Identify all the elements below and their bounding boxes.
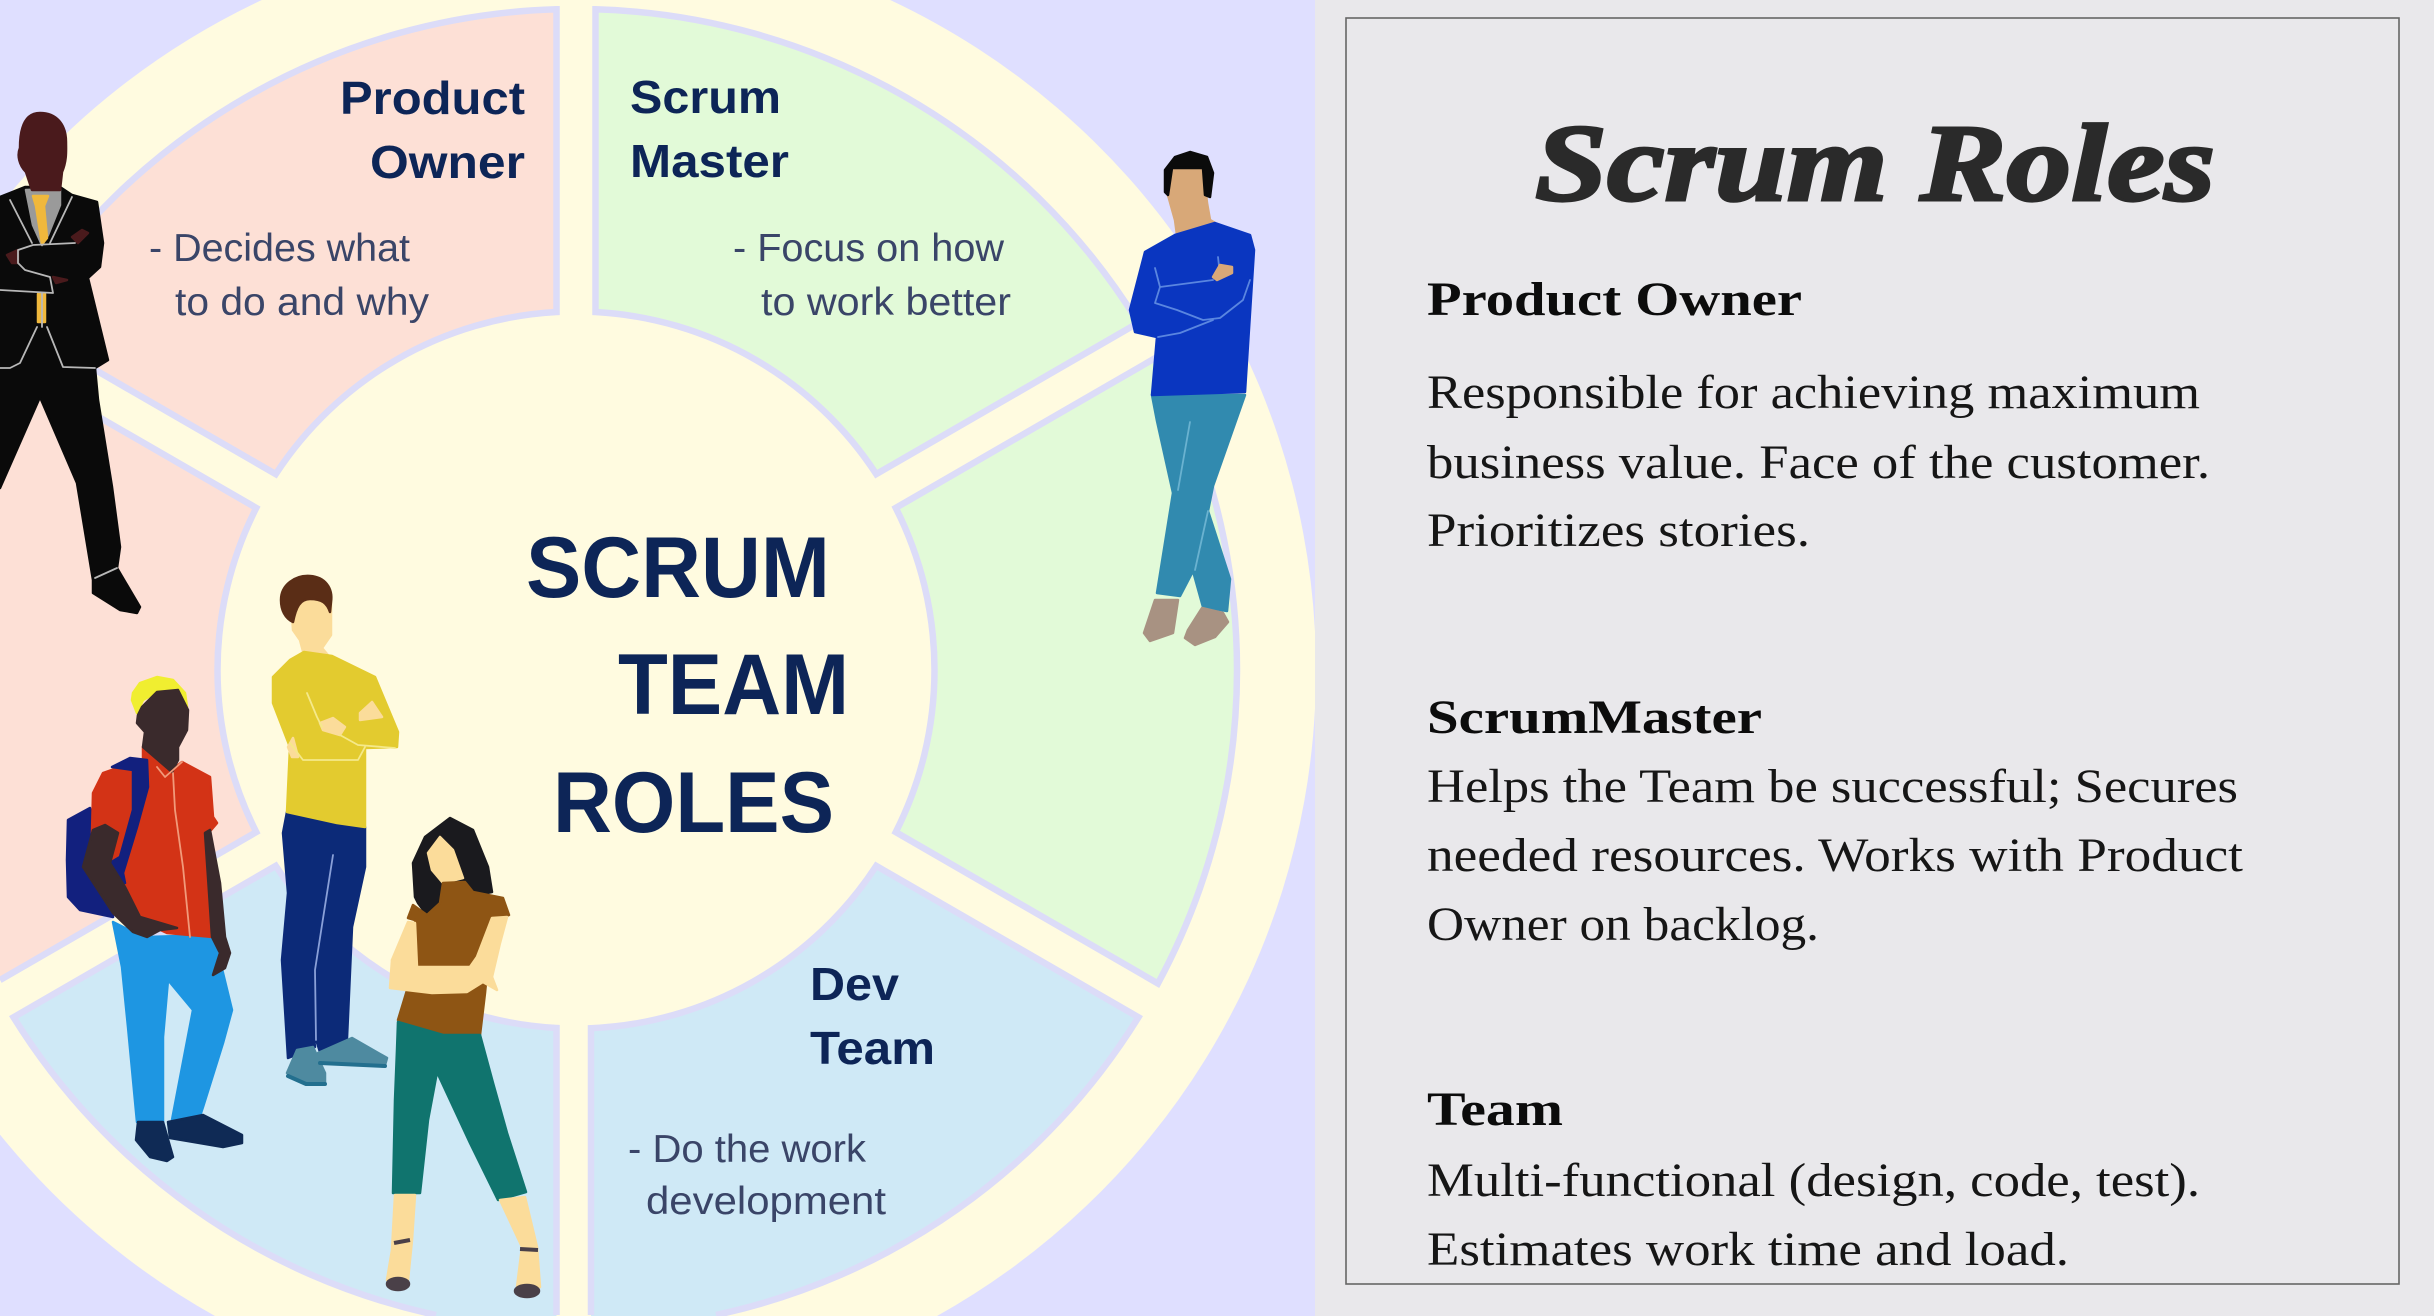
text: team role: Multi-functional (design, code, test). (1427, 1154, 2200, 1207)
figure: man in blue sweater (1130, 152, 1254, 645)
text: scrummaster role (1427, 760, 2244, 951)
heading: dev team: Team (810, 1022, 935, 1074)
figure: woman in brown top (387, 818, 540, 1297)
heading: scrum master (630, 71, 789, 187)
segment: dev team left (14, 866, 556, 1316)
outer cream disc (0, 0, 1315, 1316)
text: dev team description: - Do the work (628, 1128, 867, 1171)
heading: scrum master: Scrum (630, 71, 781, 123)
text: dev team description (628, 1128, 886, 1223)
text: product owner role: Prioritizes stories. (1427, 504, 1810, 557)
segment: scrum master right (896, 357, 1237, 983)
figure: man in suit (0, 113, 140, 613)
text: scrummaster role: Owner on backlog. (1427, 898, 1819, 951)
panel: scrum roles description (1346, 18, 2399, 1284)
text: team role: Estimates work time and load. (1427, 1223, 2069, 1276)
panel: scrum team wheel (0, 0, 1315, 1316)
text: product owner description (149, 227, 430, 324)
heading: product owner: Product (340, 72, 525, 124)
segment: scrum master top (596, 9, 1138, 474)
heading: scrum master: Master (630, 135, 789, 187)
text: product owner role: Responsible for achieving maximum (1427, 366, 2200, 419)
center title: scrum team roles (526, 520, 849, 851)
figure: man in yellow sweater (273, 576, 398, 1084)
text: dev team description: development (646, 1180, 886, 1223)
heading: team role: Team (1427, 1083, 1563, 1136)
text: product owner role: business value. Face of the customer. (1427, 436, 2210, 489)
segment: product owner top (14, 9, 556, 474)
text: product owner description: - Decides what (149, 227, 410, 270)
text: scrum master description (733, 227, 1011, 324)
text: scrum master description: to work better (761, 281, 1011, 324)
center title: scrum team roles: SCRUM (526, 520, 830, 616)
wheel segments (0, 9, 1237, 1316)
segment: dev team right (591, 866, 1138, 1316)
text: product owner role (1427, 366, 2210, 557)
heading: scrummaster role: ScrumMaster (1427, 691, 1762, 744)
title: scrum roles: Scrum Roles (1535, 102, 2215, 224)
heading: dev team (810, 958, 935, 1074)
heading: dev team: Dev (810, 958, 899, 1010)
center title: scrum team roles: TEAM (618, 637, 849, 733)
text: scrum master description: - Focus on how (733, 227, 1005, 270)
text: scrummaster role: Helps the Team be successful; Secures (1427, 760, 2238, 813)
heading: product owner role: Product Owner (1427, 273, 1802, 326)
figure: man with backpack (67, 677, 242, 1161)
center title: scrum team roles: ROLES (553, 755, 834, 851)
segment: product owner left (0, 360, 256, 980)
text: scrummaster role: needed resources. Works with Product (1427, 829, 2244, 882)
text: team role (1427, 1154, 2200, 1276)
heading: product owner (340, 72, 525, 188)
text: product owner description: to do and why (175, 281, 430, 324)
heading: product owner: Owner (370, 136, 525, 188)
